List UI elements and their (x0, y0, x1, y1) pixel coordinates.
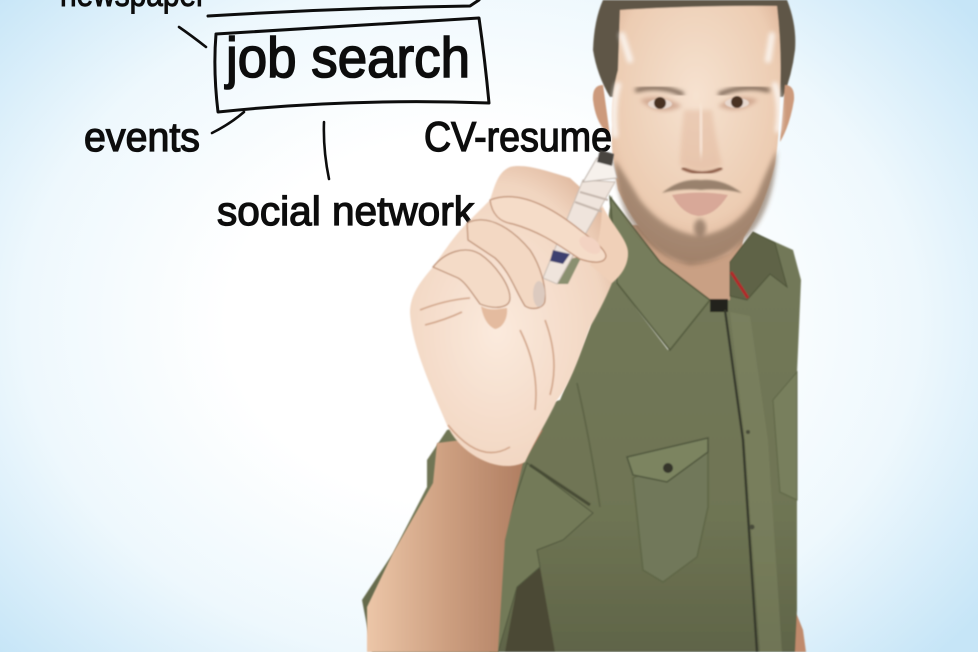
red collar tag (731, 272, 748, 298)
man: head (593, 0, 795, 265)
chest pocket left (627, 438, 708, 582)
hip skin (794, 610, 806, 652)
little finger (481, 306, 507, 329)
nose (680, 108, 722, 173)
heading text: job search (224, 26, 470, 90)
temple highlights (614, 35, 779, 135)
eyes (648, 99, 672, 109)
ring finger (433, 250, 510, 307)
label: CV-resume: CV-resume (424, 113, 612, 160)
moustache (662, 180, 742, 193)
index fingernail (576, 232, 604, 258)
diagram: handwritten job search mind map (60, 0, 612, 234)
marker pen (543, 150, 617, 284)
man: forearm (367, 430, 543, 652)
gap showing shirt (556, 256, 582, 284)
top button band (710, 299, 728, 312)
eyebrows (637, 88, 768, 94)
shirt body (362, 195, 801, 652)
hair (593, 0, 795, 97)
ears (593, 85, 794, 142)
label: social network: social network (217, 188, 474, 234)
beard stubble (615, 150, 777, 265)
connector strokes (179, 27, 329, 179)
man: hand holding marker (410, 150, 628, 466)
placket (725, 310, 782, 652)
thumb (590, 205, 628, 283)
neck (630, 225, 745, 312)
dark shadow under sleeve (505, 567, 555, 652)
collar right (730, 232, 787, 300)
folded sleeve (490, 463, 593, 652)
middle finger (467, 220, 545, 308)
knuckle creases (420, 298, 554, 453)
label: events: events (84, 114, 200, 160)
eye shadow (640, 97, 758, 111)
goatee patch (694, 219, 706, 237)
index finger (490, 197, 606, 262)
man: torso with olive shirt (362, 195, 806, 652)
lips (672, 192, 728, 216)
palm and back of hand (410, 166, 628, 466)
face (612, 6, 781, 263)
heading box: job search (208, 0, 489, 112)
collar left (610, 197, 710, 350)
middle fingernail (533, 281, 545, 307)
chest pocket right (773, 372, 797, 500)
